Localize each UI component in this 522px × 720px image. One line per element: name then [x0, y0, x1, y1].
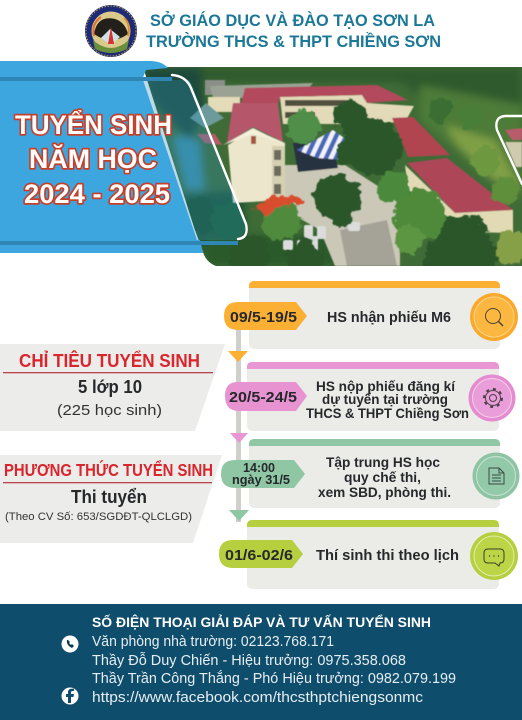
step 4: [219, 520, 518, 589]
icon: phone: [62, 636, 78, 652]
arrow: step 3 to 4: [229, 510, 249, 521]
footer contact panel: [0, 604, 522, 720]
blue banner: [0, 61, 247, 253]
school photo: [140, 67, 522, 276]
panel: chỉ tiêu tuyển sinh: CHỈ TIÊU TUYỂN SINH: [19, 350, 200, 371]
back building: [205, 80, 225, 95]
banner title: 2024 - 2025: [24, 179, 170, 209]
panel: phương thức tuyển sinh: Thi tuyển: [71, 486, 147, 507]
step 3: [221, 439, 520, 508]
step 1: 09/5-19/5: [230, 309, 297, 326]
arrow: step 1 to 2: [228, 351, 248, 362]
footer contact panel: Thầy Trần Công Thắng - Phó Hiệu trưởng: 0982.079.199: [92, 670, 456, 687]
panel: phương thức tuyển sinh: PHƯƠNG THỨC TUYỂN SINH: [4, 459, 213, 480]
step 1: [224, 281, 518, 349]
step 4: 01/6-02/6: [225, 547, 293, 564]
step 2: [225, 362, 516, 431]
icon: facebook: [62, 688, 78, 704]
banner title: [15, 109, 172, 209]
step 2: dự tuyển tại trường: [322, 392, 448, 407]
header title: [146, 11, 441, 51]
timeline connector: [236, 328, 241, 522]
step 3: Tập trung HS học: [326, 454, 440, 470]
photo frame outlines: [172, 75, 522, 239]
step 1: HS nhận phiếu M6: [327, 309, 451, 326]
main block: [227, 103, 283, 143]
panel: phương thức tuyển sinh: (Theo CV Số: 653/SGDĐT-QLCLGD): [5, 511, 192, 523]
header title: SỞ GIÁO DỤC VÀ ĐÀO TẠO SƠN LA: [150, 11, 435, 30]
logo: [85, 5, 137, 57]
step 2: 20/5-24/5: [229, 389, 297, 406]
panel: chỉ tiêu tuyển sinh: 5 lớp 10: [78, 377, 142, 397]
panel: chỉ tiêu tuyển sinh: (225 học sinh): [57, 402, 162, 419]
footer contact panel: https://www.facebook.com/thcsthptchiengsonmc: [92, 690, 423, 706]
step 3: 14:00: [243, 460, 275, 475]
footer contact panel: SỐ ĐIỆN THOẠI GIẢI ĐÁP VÀ TƯ VẤN TUYỂN SINH: [92, 613, 431, 630]
footer contact panel: Thầy Đỗ Duy Chiến - Hiệu trưởng: 0975.358.068: [92, 652, 406, 669]
arrow: step 2 to 3: [230, 433, 248, 443]
step 4: Thí sinh thi theo lịch: [316, 547, 459, 564]
trees: [182, 98, 522, 276]
step 3: ngày 31/5: [232, 472, 290, 487]
courtyard: [285, 165, 400, 266]
step 3: quy chế thi,: [344, 469, 421, 485]
right wings: [392, 117, 450, 157]
banner title: TUYỂN SINH: [15, 109, 172, 140]
panel: chỉ tiêu tuyển sinh: [0, 344, 225, 431]
panel: phương thức tuyển sinh: [0, 455, 222, 543]
footer contact panel: Văn phòng nhà trường: 02123.768.171: [92, 634, 334, 650]
step 2: THCS & THPT Chiềng Sơn: [306, 406, 469, 421]
banner title: NĂM HỌC: [29, 143, 157, 174]
cars: [283, 222, 360, 251]
step 3: xem SBD, phòng thi.: [318, 484, 451, 500]
header title: TRƯỜNG THCS & THPT CHIỀNG SƠN: [146, 32, 441, 51]
step 2: HS nộp phiếu đăng kí: [316, 379, 456, 394]
tent: [297, 130, 347, 160]
